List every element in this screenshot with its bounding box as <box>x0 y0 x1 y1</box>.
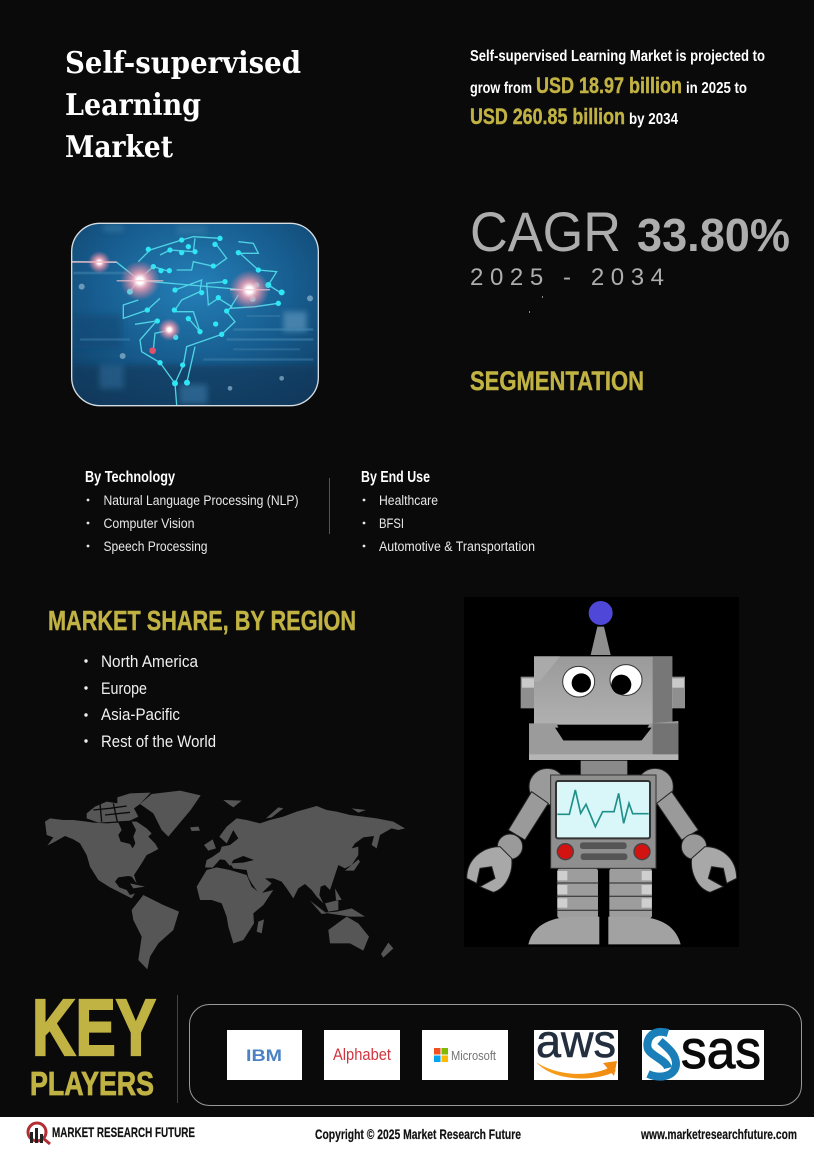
logo: Microsoft: Microsoft <box>451 1048 496 1063</box>
region list: North America <box>101 652 198 671</box>
image: AI brain circuit <box>72 223 318 408</box>
logo: Alphabet <box>324 1030 400 1080</box>
key players heading: PLAYERS <box>30 1065 154 1102</box>
segmentation: by end use <box>361 469 535 554</box>
robot torso <box>551 775 656 868</box>
world map <box>45 791 405 969</box>
title <box>65 46 301 165</box>
CAGR block: CAGR <box>470 200 621 263</box>
robot head <box>534 656 672 725</box>
market projection text <box>470 48 765 129</box>
segmentation: by end use: Automotive & Transportation <box>379 539 535 554</box>
robot antenna <box>589 601 613 655</box>
decorative specks <box>529 296 543 313</box>
logo: Microsoft <box>422 1030 508 1080</box>
segmentation: by end use: BFSI <box>379 516 404 531</box>
robot arms <box>467 768 737 892</box>
robot jaw <box>529 721 678 760</box>
CAGR block: 2025 - 2034 <box>470 264 664 291</box>
logo: SAS: sas <box>681 1020 761 1080</box>
logo: IBM <box>227 1030 302 1080</box>
region list: Asia-Pacific <box>101 705 180 724</box>
robot feet <box>528 917 681 944</box>
footer bar <box>0 1117 814 1150</box>
footer brand: MARKET RESEARCH FUTURE <box>52 1124 195 1140</box>
logo: SAS <box>642 1020 764 1080</box>
segmentation: by end use: Healthcare <box>379 493 438 508</box>
title: Market <box>65 130 173 165</box>
segmentation: by technology <box>85 469 298 554</box>
logo: Alphabet: Alphabet <box>333 1045 391 1064</box>
segmentation: by technology: Computer Vision <box>104 516 194 531</box>
robot neck <box>581 761 627 775</box>
market projection text: in 2025 to <box>686 80 747 97</box>
key players heading: KEY <box>32 983 156 1072</box>
title: Learning <box>65 88 201 123</box>
region list: Europe <box>101 679 147 698</box>
region list: Rest of the World <box>101 732 216 751</box>
key players panel <box>190 1004 802 1106</box>
segmentation: by technology: By Technology <box>85 469 175 486</box>
robot legs <box>557 868 652 918</box>
robot illustration <box>464 597 739 947</box>
market projection text: USD 260.85 billion <box>470 104 625 129</box>
logo: AWS: aws <box>536 1015 616 1067</box>
title: Self-supervised <box>65 46 301 81</box>
segmentation: by technology: Speech Processing <box>104 539 208 554</box>
region list <box>84 652 216 751</box>
market projection text: grow from <box>470 80 532 97</box>
heading: segmentation: SEGMENTATION <box>470 366 644 396</box>
footer copyright: Copyright © 2025 Market Research Future <box>315 1126 521 1142</box>
segmentation: by end use: By End Use <box>361 469 430 486</box>
segmentation: by technology: Natural Language Processing (NLP) <box>104 493 298 508</box>
market projection text: by 2034 <box>629 111 678 128</box>
heading: market share by region: MARKET SHARE, BY REGION <box>48 605 356 636</box>
CAGR block: 33.80% <box>637 209 790 261</box>
logo: IBM: IBM <box>246 1046 282 1065</box>
market projection text: USD 18.97 billion <box>536 73 682 98</box>
footer logo icon <box>28 1123 50 1144</box>
robot ears <box>521 677 685 708</box>
key players heading <box>30 983 156 1102</box>
CAGR block <box>470 200 790 291</box>
